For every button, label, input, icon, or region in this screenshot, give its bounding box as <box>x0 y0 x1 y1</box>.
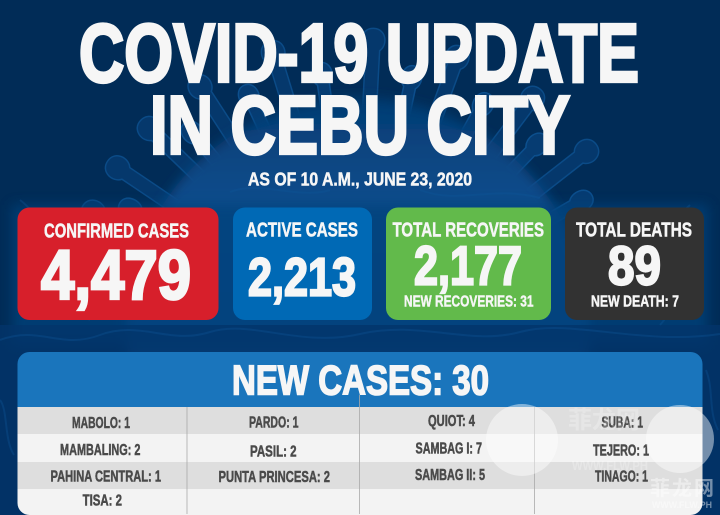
panel: new cases table <box>18 352 702 515</box>
barangay counts: MABOLO: 1 <box>72 415 130 432</box>
barangay counts: PASIL: 2 <box>250 444 297 460</box>
table rows <box>18 407 702 489</box>
panel: active cases <box>233 208 372 320</box>
panel: total recoveries: 2,177 <box>414 234 522 296</box>
barangay counts: TEJERO: 1 <box>593 442 649 460</box>
panel: confirmed cases <box>18 208 218 320</box>
barangay counts: PUNTA PRINCESA: 2 <box>218 469 330 486</box>
panel: total deaths <box>565 208 704 320</box>
barangay counts <box>50 413 649 510</box>
virus surface texture <box>0 188 720 455</box>
column separators <box>187 395 534 514</box>
barangay counts: PARDO: 1 <box>249 414 299 432</box>
barangay counts: QUIOT: 4 <box>428 413 475 430</box>
panel: total recoveries <box>386 208 551 320</box>
panel: active cases: ACTIVE CASES <box>246 220 358 242</box>
table alternating rows <box>18 434 702 515</box>
panel: total deaths: NEW DEATH: 7 <box>591 294 679 310</box>
panel: confirmed cases: 4,479 <box>41 236 191 314</box>
panel: total deaths: 89 <box>608 234 661 296</box>
barangay counts: TINAGO: 1 <box>595 468 648 486</box>
table header <box>18 352 702 407</box>
watermark: WWW.FLW.PH <box>572 458 648 473</box>
watermark <box>486 400 714 510</box>
watermark: 菲龙网 <box>568 400 640 435</box>
watermark: 菲龙网 <box>650 472 714 501</box>
title <box>79 6 639 172</box>
new cases heading: NEW CASES: 30 <box>232 356 489 404</box>
date subtitle: AS OF 10 A.M., JUNE 23, 2020 <box>248 170 472 190</box>
barangay counts: SUBA: 1 <box>602 414 643 432</box>
barangay counts: SAMBAG I: 7 <box>416 440 482 458</box>
title: IN CEBU CITY <box>150 78 570 172</box>
panel: confirmed cases: CONFIRMED CASES <box>44 220 189 242</box>
panel: active cases: 2,213 <box>248 248 356 308</box>
barangay counts: TISA: 2 <box>83 492 122 510</box>
barangay counts: PAHINA CENTRAL: 1 <box>50 468 161 486</box>
watermark: WWW.FLW.PH <box>652 500 712 510</box>
panel: total recoveries: NEW RECOVERIES: 31 <box>404 294 534 310</box>
barangay counts: SAMBAG II: 5 <box>415 467 485 484</box>
barangay counts: MAMBALING: 2 <box>60 442 140 459</box>
panel: total recoveries: TOTAL RECOVERIES <box>392 220 544 242</box>
